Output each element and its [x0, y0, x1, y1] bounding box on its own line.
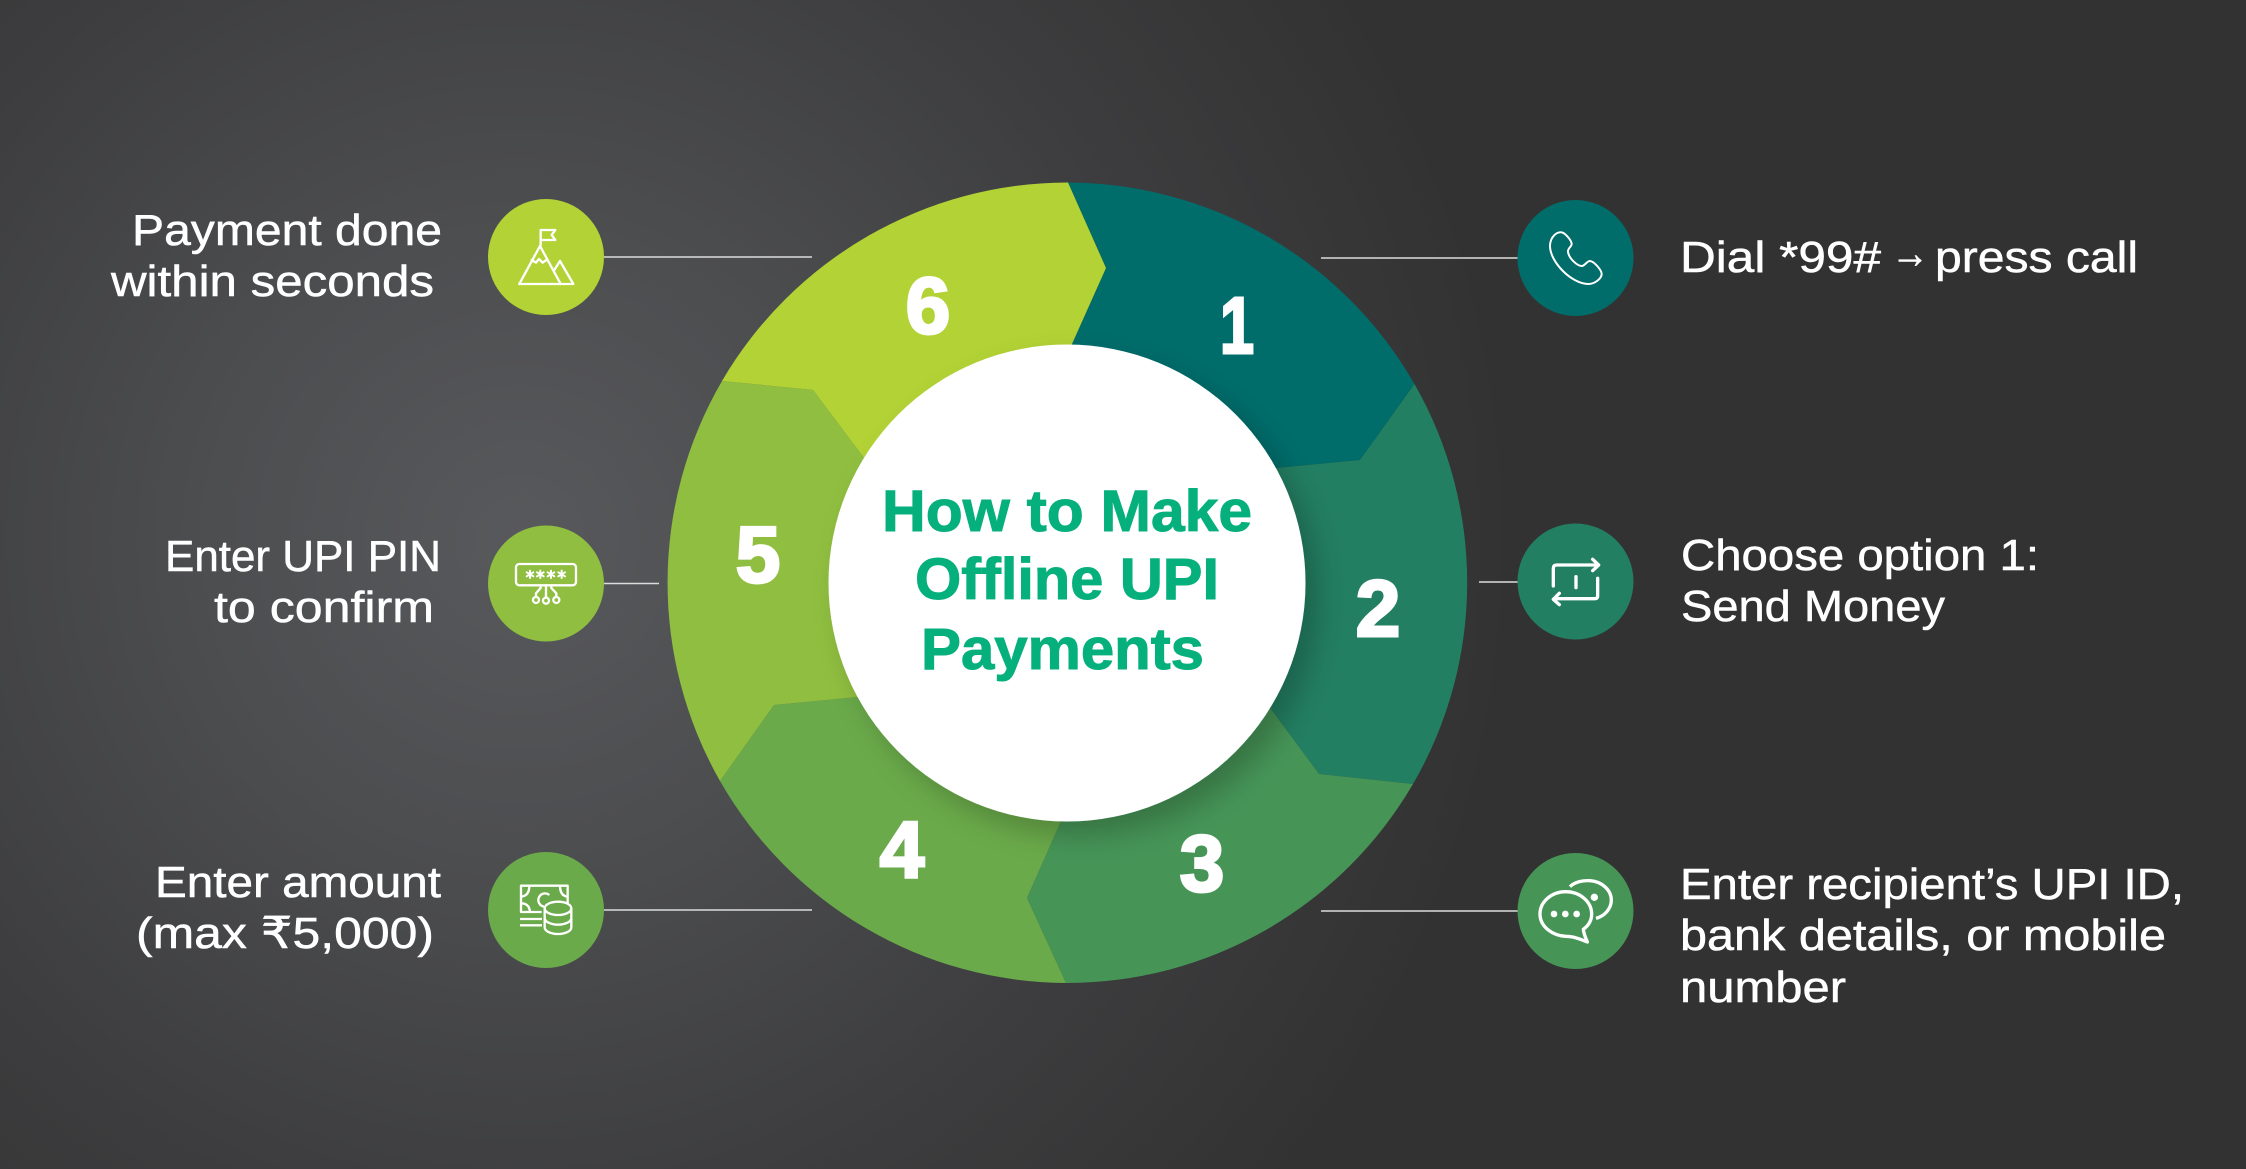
centre circle [828, 344, 1306, 822]
icon: chat bubbles [1540, 881, 1611, 942]
text: step 2: Choose option 1: [1681, 531, 2039, 580]
text: step 3: bank details, or mobile [1680, 911, 2166, 960]
text: step 2: Send Money [1681, 582, 1945, 631]
segment 1 [1067, 182, 1414, 583]
number 6: 6 [906, 261, 950, 350]
text: step 1: → [1891, 229, 1929, 278]
icon: PIN entry [516, 564, 576, 604]
badge circle step 5 [488, 526, 604, 642]
icon: mountain with flag [519, 230, 573, 284]
segment 6 [722, 182, 1106, 583]
text: step 5: to confirm [214, 583, 434, 632]
connector step 2 [1479, 581, 1518, 583]
number 1: 1 [1220, 281, 1254, 370]
number 2: 2 [1356, 564, 1400, 653]
badge circle step 1 [1518, 200, 1634, 316]
number 4: 4 [880, 805, 925, 894]
icon: repeat arrows with 1 [1553, 559, 1599, 605]
segment 3 [1027, 583, 1413, 983]
badge circle step 4 [488, 852, 604, 968]
badge circle step 3 [1518, 853, 1634, 969]
connector step 6 [604, 256, 812, 258]
text: step 6 [110, 206, 442, 306]
text: step 1: press call [1935, 233, 2138, 282]
number 5: 5 [736, 510, 780, 599]
text: step 5 [165, 532, 441, 632]
ring diagram [668, 182, 1467, 983]
connector step 4 [604, 909, 812, 911]
text: step 2 [1681, 531, 2039, 631]
text: step 6: Payment done [132, 206, 442, 255]
connector step 3 [1321, 910, 1518, 912]
text: step 3 [1680, 860, 2184, 1012]
title: Offline UPI [915, 547, 1219, 612]
text: step 3: Enter recipient’s UPI ID, [1680, 860, 2184, 909]
icon: cash and coins [520, 886, 571, 934]
title [882, 479, 1252, 682]
text: step 1: Dial *99# [1680, 233, 1882, 282]
text: step 1 [1680, 229, 2138, 282]
connector step 1 [1321, 257, 1518, 259]
segment 5 [668, 381, 1067, 781]
badge circle step 6 [488, 199, 604, 315]
text: step 4: (max ₹5,000) [136, 909, 434, 958]
connector step 5 [604, 582, 659, 584]
number 3: 3 [1180, 819, 1224, 908]
text: step 5: Enter UPI PIN [165, 532, 441, 581]
icon: phone [1550, 232, 1602, 284]
text: step 4 [136, 858, 441, 958]
segment 2 [1067, 384, 1467, 784]
title: How to Make [882, 479, 1252, 544]
title: Payments [921, 617, 1204, 682]
text: step 6: within seconds [110, 257, 434, 306]
badge circle step 2 [1518, 524, 1634, 640]
text: step 3: number [1680, 963, 1846, 1012]
text: step 4: Enter amount [155, 858, 441, 907]
segment 4 [720, 583, 1067, 983]
